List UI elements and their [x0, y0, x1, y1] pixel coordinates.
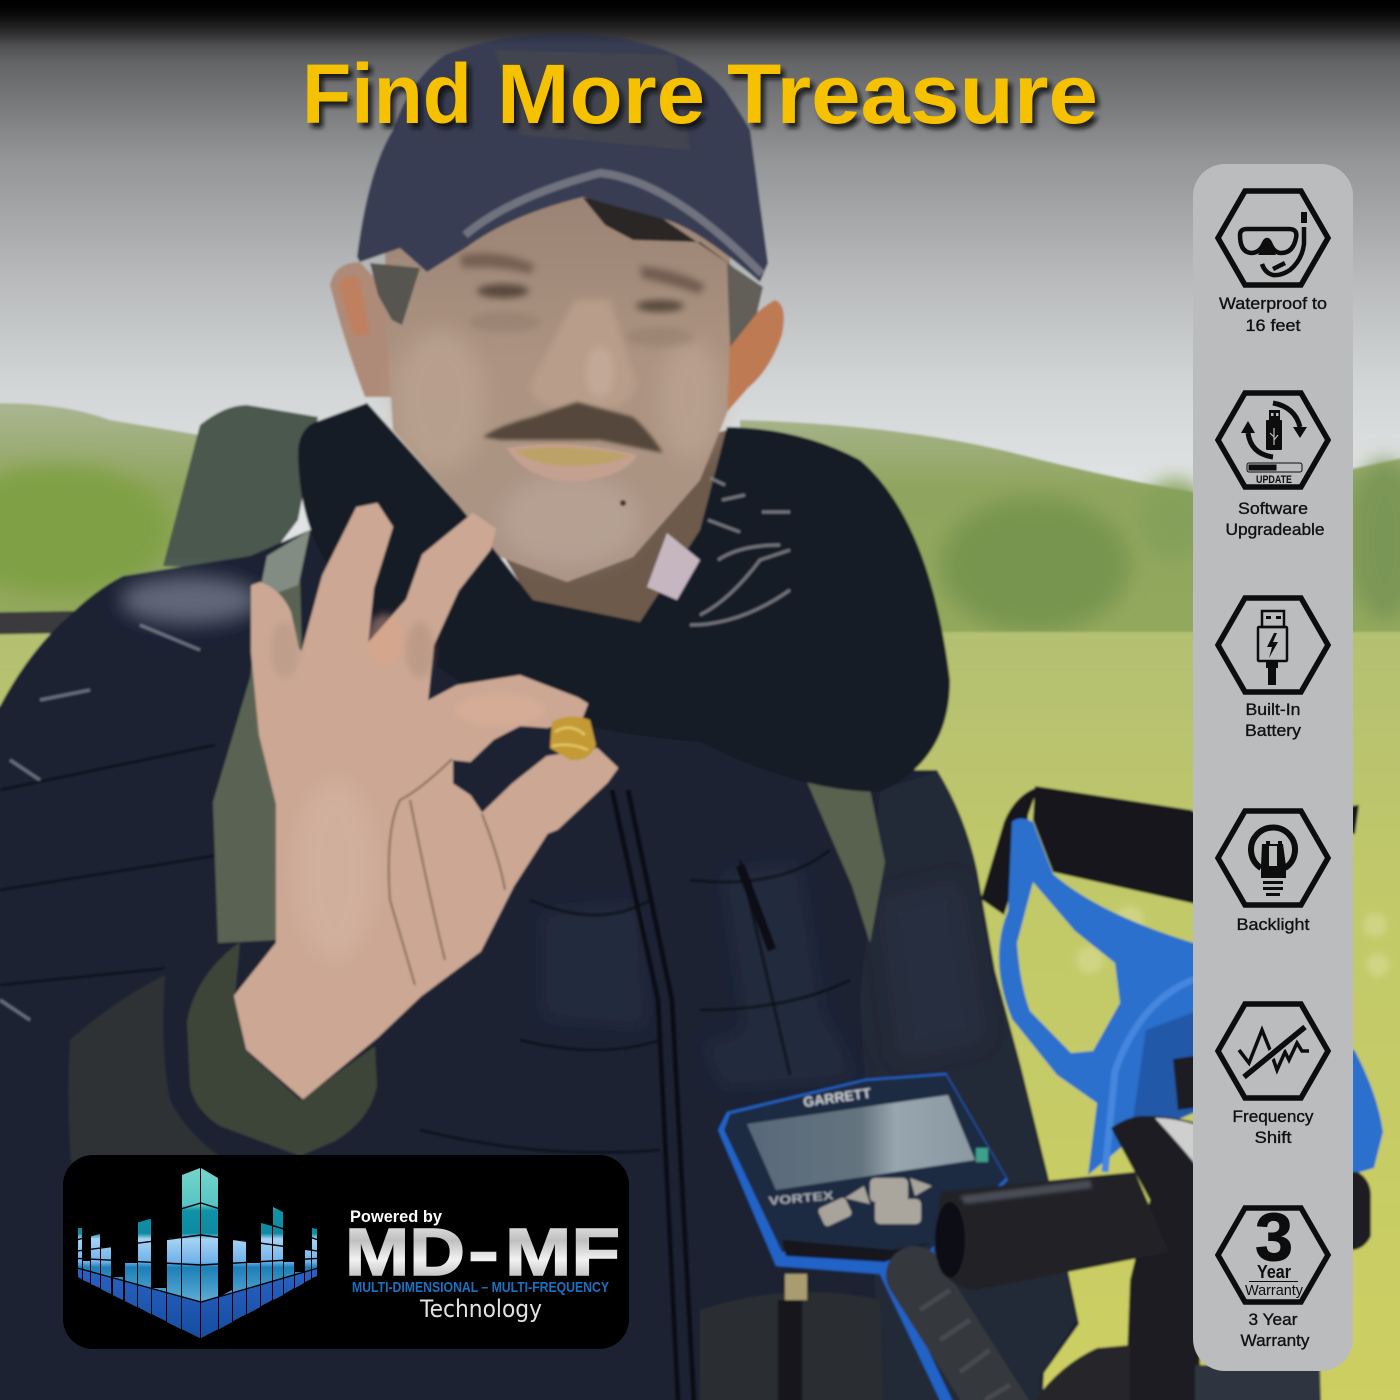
icon: usb update in hexagon: [1218, 393, 1328, 487]
hair: [370, 198, 763, 347]
icon: snorkel mask in hexagon: [1218, 191, 1328, 285]
icon: light bulb in hexagon: [1218, 811, 1328, 905]
icon: 3 year warranty hexagon: Warranty: [1245, 1282, 1303, 1299]
cap patch: [495, 50, 690, 150]
grass field: [0, 632, 1400, 1400]
shaft highlight: [1155, 1118, 1200, 1170]
facial features: [395, 253, 720, 565]
scarf: [298, 403, 950, 792]
title shadow: [306, 52, 1102, 146]
hills and bushes: [0, 403, 1400, 640]
icon: usb charger in hexagon: [1218, 598, 1328, 692]
panel background: [1193, 164, 1353, 1371]
label: [1245, 700, 1302, 740]
title shadow: Find: [306, 52, 476, 146]
title: [302, 47, 1102, 146]
icon: city equalizer logo: [78, 1168, 317, 1338]
label: Software: [1238, 499, 1308, 518]
label: [1232, 1107, 1314, 1147]
cable: [778, 1274, 807, 1400]
title text: [302, 47, 1098, 141]
hand showing OK sign: [235, 504, 617, 1098]
label: Waterproof to: [1219, 294, 1327, 313]
powered by: Powered by: [350, 1208, 443, 1226]
scarf fleece texture: [690, 478, 790, 625]
icon: 3 year warranty hexagon: 3: [1255, 1199, 1293, 1275]
feature: warranty: [1218, 1199, 1328, 1350]
panel: feature list: [1193, 164, 1353, 1371]
vertical shaft: [1111, 1116, 1200, 1400]
armrest strap: [981, 786, 1359, 915]
lower sleeve: [0, 942, 333, 1400]
cuff: [187, 942, 377, 1156]
MD-MF wordmark: MD: [345, 1215, 465, 1290]
jacket hem: [1195, 1365, 1322, 1400]
jacket: [0, 530, 1079, 1400]
label: [1240, 1310, 1310, 1350]
feature: backlight: [1218, 811, 1328, 934]
label: Frequency: [1233, 1107, 1314, 1126]
jacket zipper: [612, 790, 696, 1400]
MD-MF wordmark: -: [468, 1214, 499, 1289]
rope at left: [0, 622, 75, 624]
title shadow: More: [501, 52, 709, 146]
label: [1226, 499, 1324, 539]
badge background: [63, 1155, 629, 1349]
jacket shoulder highlight: [0, 576, 260, 1020]
blue armrest: [999, 818, 1200, 1175]
hand creases: [389, 759, 505, 985]
label: Warranty: [1240, 1331, 1310, 1350]
detector console: VORTEX: [768, 1188, 834, 1208]
foam grip: [915, 1275, 1020, 1400]
label: [1219, 294, 1327, 335]
armrest inner mechanism: [1105, 979, 1200, 1172]
detector console: GARRETT: [802, 1085, 872, 1110]
blue armrest right side: [1350, 1048, 1383, 1175]
label: 16 feet: [1246, 316, 1301, 335]
cap: [357, 33, 768, 282]
technology: Technology: [419, 1295, 542, 1323]
label: Battery: [1245, 721, 1302, 740]
icon: 3 year warranty hexagon: [1218, 1199, 1328, 1302]
label: Built-In: [1246, 700, 1300, 719]
blue shaft under console: [885, 1272, 965, 1400]
title shadow: Treasure: [731, 52, 1102, 146]
title text: Find: [302, 47, 472, 141]
feature: frequency shift: [1218, 1004, 1328, 1147]
multi-dimensional multi-frequency: MULTI-DIMENSIONAL – MULTI-FREQUENCY: [352, 1279, 609, 1296]
label: Shift: [1254, 1128, 1292, 1147]
badge: MD-MF technology: [63, 1155, 629, 1349]
neck: [470, 430, 727, 630]
cap brim edge: [465, 173, 762, 274]
handle cylinder: [934, 1172, 1169, 1290]
gold nugget: [550, 716, 596, 760]
lower sleeve zipper pull: [740, 865, 772, 950]
face: [385, 190, 730, 582]
detector console: [718, 1073, 1008, 1275]
icon: 3 year warranty hexagon: Year: [1257, 1262, 1291, 1282]
jacket below console: [700, 1292, 885, 1400]
label: Backlight: [1236, 915, 1310, 934]
icon: frequency wave in hexagon: [1218, 1004, 1328, 1098]
ears: [330, 262, 784, 420]
feature: battery: [1218, 598, 1328, 740]
title text: More: [497, 47, 705, 141]
title text: Treasure: [727, 47, 1098, 141]
wheel: [1035, 1345, 1130, 1400]
feature: waterproof: [1218, 191, 1328, 335]
top fade: [0, 0, 1400, 45]
shirt collar: [647, 533, 700, 600]
icon: usb update in hexagon: UPDATE: [1256, 474, 1292, 486]
jacket quilted panels: [540, 860, 985, 1090]
grass highlights: [1076, 906, 1390, 977]
feature: software: [1218, 393, 1328, 539]
shoulder straps: [213, 530, 885, 943]
backpack: [163, 405, 318, 570]
label: Upgradeable: [1226, 520, 1324, 539]
black knob right side: [1350, 1172, 1371, 1250]
MD-MF wordmark: MF: [505, 1215, 620, 1290]
jacket quilting: [0, 745, 850, 1152]
label: 3 Year: [1248, 1310, 1298, 1329]
jacket right arm lighter: [860, 772, 1076, 1400]
cuff band: [68, 975, 240, 1200]
sky: [0, 0, 1400, 720]
